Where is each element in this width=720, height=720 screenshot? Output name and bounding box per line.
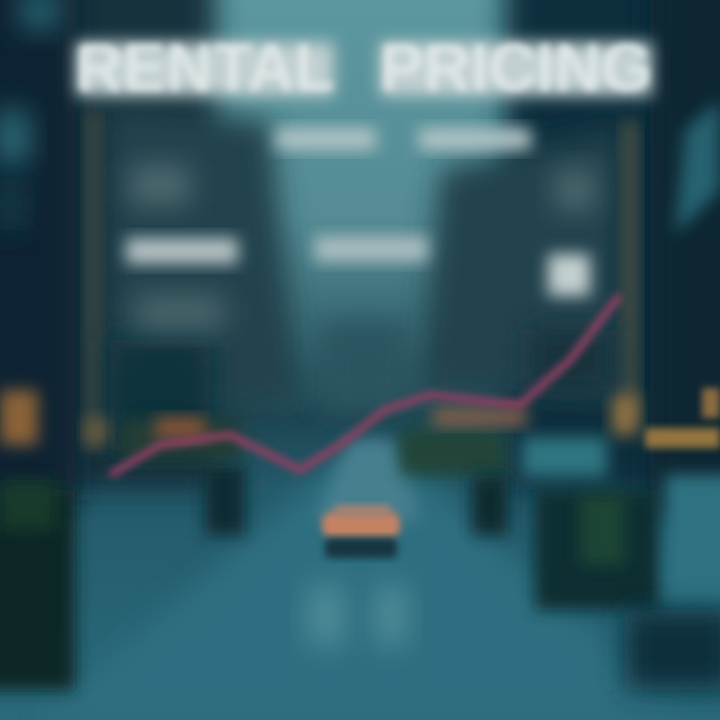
signs: warm orange glow right xyxy=(432,388,720,448)
labels: blurred mid-page captions xyxy=(126,236,590,296)
buildings: left side xyxy=(0,0,300,500)
background: distant street haze xyxy=(320,320,410,410)
signs: warm orange glow left xyxy=(0,390,205,445)
trees and dark foreground: right xyxy=(400,430,720,690)
title: blurred headline: RENTAL xyxy=(76,30,334,104)
trees and dark foreground: left xyxy=(0,420,245,690)
car: orange vehicle on street xyxy=(322,505,400,558)
title: blurred headline xyxy=(76,30,652,104)
buildings: right side xyxy=(420,0,720,520)
street: wet road surface xyxy=(40,440,690,720)
subtitle: blurred white labels xyxy=(276,128,531,150)
chart line: magenta trend line xyxy=(110,295,620,475)
title: blurred headline: PRICING xyxy=(380,30,652,104)
